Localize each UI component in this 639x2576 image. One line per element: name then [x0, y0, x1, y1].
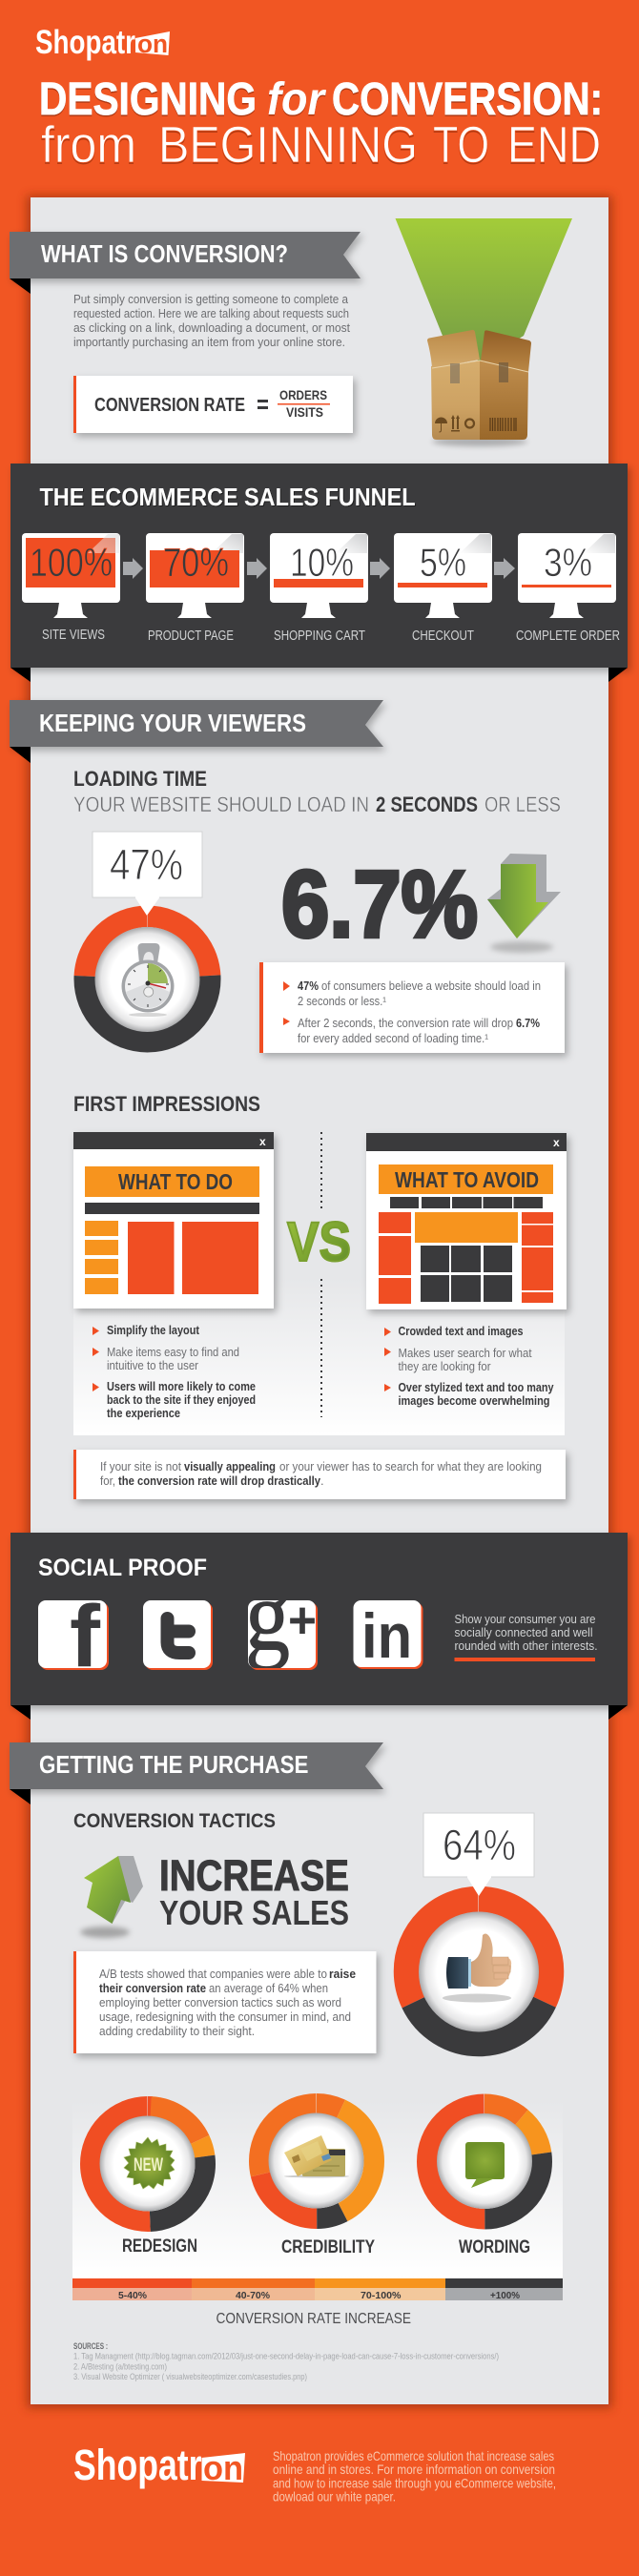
subheading: load in 2 seconds: OR LESS: [484, 793, 561, 816]
window: what to do: WHAT TO DO: [118, 1169, 233, 1194]
callout: 47%: [93, 832, 202, 916]
monitor: complete order 3%: [516, 533, 620, 644]
headline: increase your sales: [159, 1851, 349, 1932]
arrow: funnel step 3: [370, 558, 390, 579]
callout: loading time stats: 47%: [298, 979, 319, 993]
legend: conversion rate increase: 40-70%: [236, 2290, 271, 2301]
heading: social proof: SOCIAL PROOF: [38, 1555, 207, 1581]
section: conversion tactics: [73, 1810, 551, 2053]
list: what to avoid bullets: Crowded text and images: [399, 1324, 523, 1338]
chart: redesign donut: [91, 2107, 205, 2257]
subheading: load in 2 seconds: 2 SECONDS: [376, 793, 478, 816]
text: sources: 3. Visual Website Optimizer ( visualwebsiteoptimizer.com/casestudies.pnp): [73, 2372, 307, 2382]
text: definition of conversion: importantly purchasing an item from your online store.: [73, 335, 345, 349]
panel: social proof: [10, 1533, 628, 1720]
heading: loading time: LOADING TIME: [73, 767, 207, 791]
monitor: site views 100%: 100%: [30, 540, 113, 585]
section: first impressions: [73, 1092, 567, 1499]
text: footer about Shopatron: [273, 2448, 556, 2504]
label: conversion rate increase: CONVERSION RATE INCREASE: [216, 2311, 411, 2327]
icon: twitter: [143, 1600, 213, 1670]
monitor: checkout 5%: CHECKOUT: [412, 629, 474, 644]
panel: ecommerce sales funnel: [10, 464, 628, 682]
logo: Shopatron footer: Shopatr: [73, 2441, 202, 2489]
text: footer about Shopatron: and how to increase sale through you eCommerce website,: [273, 2476, 556, 2491]
list: what to avoid bullets: Over stylized text and too many: [399, 1380, 554, 1394]
list: what to do bullets: back to the site if they enjoyed: [107, 1392, 256, 1407]
chart: credibility donut: [259, 2104, 375, 2257]
list: what to avoid bullets: [384, 1324, 554, 1408]
text: definition of conversion: Put simply conversion is getting someone to complete a: [73, 292, 349, 306]
title: [39, 74, 603, 174]
monitor: site views 100%: [22, 533, 120, 643]
list: what to do bullets: [93, 1323, 256, 1420]
icon: google plus: g: [245, 1559, 290, 1671]
monitor: site views 100%: SITE VIEWS: [42, 628, 105, 643]
label: redesign: REDESIGN: [122, 2236, 197, 2257]
title: DESIGNING: [39, 74, 257, 125]
callout: visual appeal note: the conversion rate will drop drastically: [118, 1473, 321, 1488]
subheading: load in 2 seconds: YOUR WEBSITE SHOULD LOAD IN: [73, 793, 369, 816]
title: for: [267, 74, 326, 125]
icon: green beam rising from open box: [395, 218, 572, 446]
icon: stopwatch: [122, 943, 174, 1017]
callout: loading time stats: [259, 962, 565, 1053]
text: sources: 2. A/Btesting (a/btesting.com): [73, 2361, 167, 2373]
monitor: checkout 5%: 5%: [420, 540, 466, 585]
callout: A/B tests text: raise: [329, 1967, 356, 1981]
chart: wording donut: [427, 2104, 542, 2257]
icon: new badge: [124, 2137, 175, 2189]
list: what to avoid bullets: they are looking for: [399, 1359, 491, 1373]
ribbon heading: keeping your viewers: KEEPING YOUR VIEWERS: [39, 709, 306, 737]
panel: what is conversion: [10, 218, 572, 446]
monitor: product page 70%: PRODUCT PAGE: [148, 629, 234, 644]
callout: A/B tests text: A/B tests showed that companies were able to: [99, 1967, 327, 1981]
window: what to avoid: x: [553, 1136, 560, 1149]
ribbon heading: what is conversion: [10, 232, 361, 294]
legend: conversion rate increase: [72, 2278, 563, 2327]
monitor: complete order 3%: 3%: [544, 540, 592, 585]
panel: tactic charts backdrop: [72, 2101, 563, 2278]
list: what to avoid bullets: images become overwhelming: [399, 1393, 550, 1408]
monitor: checkout 5%: [394, 533, 492, 644]
window: what to do: x: [259, 1135, 266, 1148]
callout: loading time stats: 6.7%: [516, 1016, 540, 1030]
callout: loading time stats: 2 seconds or less.¹: [298, 994, 387, 1008]
big number: 6.7%: 6.7%: [281, 851, 478, 957]
text: social proof message: socially connected and well: [454, 1625, 593, 1639]
callout: A/B tests text: an average of 64% when: [209, 1981, 328, 1995]
list: what to do bullets: the experience: [107, 1406, 180, 1420]
text: social proof message: Show your consumer you are: [454, 1612, 595, 1626]
callout: loading time stats: of consumers believe a website should load in: [321, 979, 541, 993]
icon: facebook: f: [70, 1588, 100, 1685]
callout: visual appeal note: .: [320, 1473, 324, 1488]
callout: A/B tests text: [73, 1951, 376, 2053]
title: END: [507, 116, 601, 174]
icon: linkedin: in: [361, 1600, 412, 1671]
chart: 64% donut with thumbs up: [406, 1813, 551, 2044]
ribbon heading: what is conversion: WHAT IS CONVERSION?: [41, 239, 288, 268]
icon: thumbs up: [443, 1934, 511, 2003]
icon: google plus: [248, 1600, 318, 1670]
title: BEGINNING: [158, 116, 418, 174]
label: wording: WORDING: [459, 2237, 530, 2257]
title: TO: [433, 116, 489, 174]
list: what to do bullets: Simplify the layout: [107, 1323, 200, 1337]
heading: ecommerce sales funnel: THE ECOMMERCE SALES FUNNEL: [40, 483, 416, 511]
ribbon heading: keeping your viewers: [10, 700, 383, 763]
icon: green up arrow: [80, 1856, 143, 1938]
text: definition of conversion: requested action. Here we are talking about requests such: [73, 306, 349, 320]
headline: increase your sales: YOUR SALES: [159, 1893, 349, 1932]
list: what to avoid bullets: Makes user search for what: [399, 1346, 532, 1360]
callout: visual appeal note: [73, 1450, 566, 1499]
callout: visual appeal note: or your viewer has to search for what they are looking: [279, 1459, 542, 1473]
monitor: product page 70%: [146, 533, 244, 644]
text: sources: SOURCES :: [73, 2341, 108, 2352]
callout: conversion rate formula: VISITS: [286, 404, 323, 420]
logo: Shopatron header: Shopatr: [35, 24, 135, 61]
callout: visual appeal note: visually appealing: [184, 1459, 276, 1473]
icon: google plus: +: [288, 1592, 317, 1649]
logo: Shopatron header: on: [137, 30, 168, 58]
text: social proof message: [454, 1612, 597, 1661]
list: what to do bullets: intuitive to the user: [107, 1358, 199, 1372]
arrow: funnel step 2: [247, 558, 267, 579]
callout: 47%: 47%: [110, 840, 183, 889]
title: from: [41, 116, 136, 174]
window: what to avoid: WHAT TO AVOID: [395, 1167, 539, 1192]
heading: first impressions: FIRST IMPRESSIONS: [73, 1092, 260, 1116]
icon: facebook: [38, 1588, 109, 1685]
callout: 64%: 64%: [443, 1821, 516, 1869]
icon: speech bubble: [465, 2142, 505, 2188]
icon: green down arrow: [487, 854, 561, 953]
icon: credit cards: [284, 2135, 349, 2178]
text: definition of conversion: [73, 292, 350, 349]
text: footer about Shopatron: online and in stores. For more information on conversion: [273, 2462, 555, 2477]
callout: loading time stats: for every added second of loading time.¹: [298, 1031, 489, 1045]
monitor: shopping cart 10%: SHOPPING CART: [274, 629, 365, 644]
headline: increase your sales: INCREASE: [159, 1851, 349, 1900]
callout: visual appeal note: If your site is not: [100, 1459, 181, 1473]
callout: 64%: [423, 1813, 534, 1896]
callout: A/B tests text: usage, redesigning with the consumer in mind, and: [99, 2009, 351, 2024]
legend: conversion rate increase: 5-40%: [118, 2290, 148, 2301]
panel: gradient backdrop: [73, 1278, 565, 1435]
ribbon heading: getting the purchase: [10, 1742, 383, 1804]
text: footer about Shopatron: dowload our white paper.: [273, 2489, 396, 2504]
icon: new badge: NEW: [134, 2155, 163, 2175]
monitor: shopping cart 10%: [270, 533, 368, 644]
text: footer about Shopatron: Shopatron provides eCommerce solution that increase sales: [273, 2448, 554, 2463]
callout: visual appeal note: for,: [100, 1473, 115, 1488]
arrow: funnel step 1: [123, 558, 143, 579]
chart: 47% donut with stopwatch: [85, 832, 210, 1041]
list: what to do bullets: Users will more likely to come: [107, 1379, 256, 1393]
section: loading time: [73, 767, 565, 1053]
text: definition of conversion: as clicking on a link, downloading a document, or most: [73, 320, 350, 335]
callout: A/B tests text: employing better conversion tactics such as word: [99, 1995, 341, 2009]
panel: main light sheet: [27, 196, 612, 2408]
callout: conversion rate formula: ORDERS: [279, 387, 327, 402]
text: sources: 1. Tag Managment (http://blog.tagman.com/2012/03/just-one-second-delay-in-page-load-can-cause-7-loss-in-customer-conversions/): [73, 2352, 499, 2361]
window: what to do: [73, 1132, 274, 1309]
window: what to avoid: [366, 1133, 567, 1309]
text: social proof message: rounded with other interests.: [454, 1638, 597, 1653]
label: credibility: CREDIBILITY: [281, 2237, 375, 2257]
vs divider: VS: [287, 1211, 351, 1273]
callout: A/B tests text: adding credability to their sight.: [99, 2024, 255, 2038]
legend: conversion rate increase: +100%: [490, 2290, 521, 2301]
callout: conversion rate formula: [73, 376, 353, 433]
callout: loading time stats: After 2 seconds, the conversion rate will drop: [298, 1016, 513, 1030]
callout: A/B tests text: their conversion rate: [99, 1981, 206, 1995]
heading: conversion tactics: CONVERSION TACTICS: [73, 1810, 276, 1832]
logo: Shopatron footer: on: [203, 2448, 243, 2487]
text: sources: [73, 2341, 499, 2382]
ribbon heading: getting the purchase: GETTING THE PURCHASE: [39, 1750, 309, 1779]
monitor: shopping cart 10%: 10%: [290, 540, 354, 585]
callout: conversion rate formula: CONVERSION RATE: [94, 395, 245, 416]
legend: conversion rate increase: 70-100%: [361, 2290, 402, 2301]
list: what to do bullets: Make items easy to find and: [107, 1345, 239, 1359]
arrow: funnel step 4: [494, 558, 515, 579]
monitor: product page 70%: 70%: [163, 540, 229, 585]
